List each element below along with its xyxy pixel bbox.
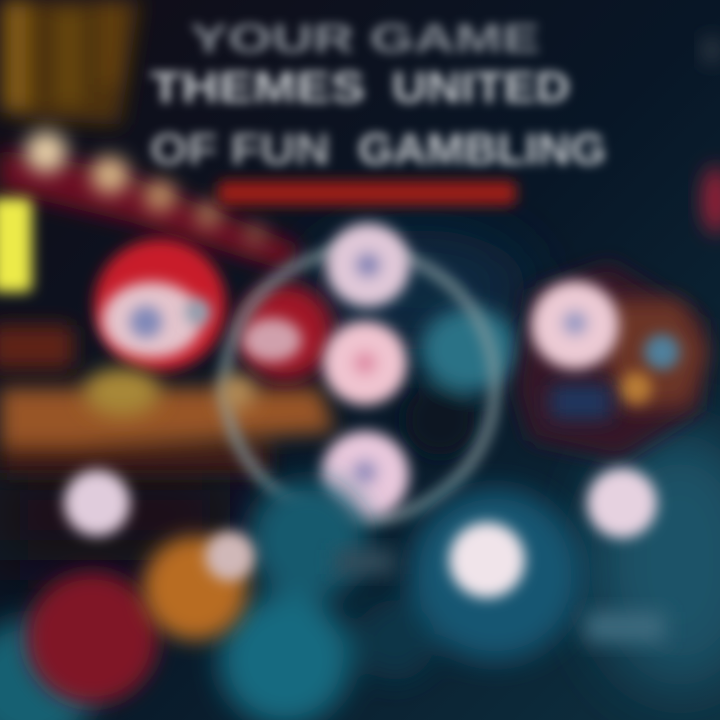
wooden shelf <box>0 388 335 473</box>
small central label <box>335 550 395 574</box>
right bottom label <box>585 612 665 642</box>
bottom centre node <box>449 522 525 598</box>
title <box>150 17 606 174</box>
small character face <box>242 318 302 362</box>
title: THEMES <box>150 63 365 112</box>
orange ring accent <box>219 374 255 410</box>
title: GAMBLING <box>358 125 606 174</box>
title: UNITED <box>392 63 570 112</box>
title: YOUR GAME <box>190 17 540 61</box>
red character second eye <box>185 299 211 325</box>
red character small <box>237 284 333 380</box>
top right faint mark <box>703 37 720 63</box>
garland lights <box>25 131 265 245</box>
top-left golden curtain <box>0 0 140 125</box>
teal spheres lower area <box>0 480 581 720</box>
orange accent icon <box>620 372 652 404</box>
dark blue label block <box>550 385 612 419</box>
hexagon inner icon <box>644 334 680 370</box>
right node <box>531 281 619 369</box>
red character eye <box>130 306 162 338</box>
small orange-red panel left <box>0 325 74 369</box>
title: OF FUN <box>150 125 330 174</box>
yellow base under large character <box>84 368 160 416</box>
crimson sphere <box>26 572 158 704</box>
ring node top <box>326 223 410 307</box>
orange sphere <box>143 536 247 640</box>
left bottom node <box>64 470 130 536</box>
right bottom node <box>587 468 657 538</box>
background glow: lower right teal <box>0 230 720 690</box>
right maroon panel <box>515 262 708 460</box>
red subtitle bar <box>218 181 516 205</box>
red diagonal garland band <box>0 150 300 272</box>
ring node middle <box>323 321 407 405</box>
orange sphere node <box>205 531 255 581</box>
yellow sign at left edge <box>0 198 32 292</box>
ring node bottom <box>321 431 409 519</box>
red character large <box>94 239 226 371</box>
red character face <box>102 282 202 358</box>
right edge red mark <box>702 166 720 234</box>
ring diagram <box>225 250 495 520</box>
teal blob behind ring <box>405 308 520 455</box>
hexagon brown <box>605 300 708 410</box>
